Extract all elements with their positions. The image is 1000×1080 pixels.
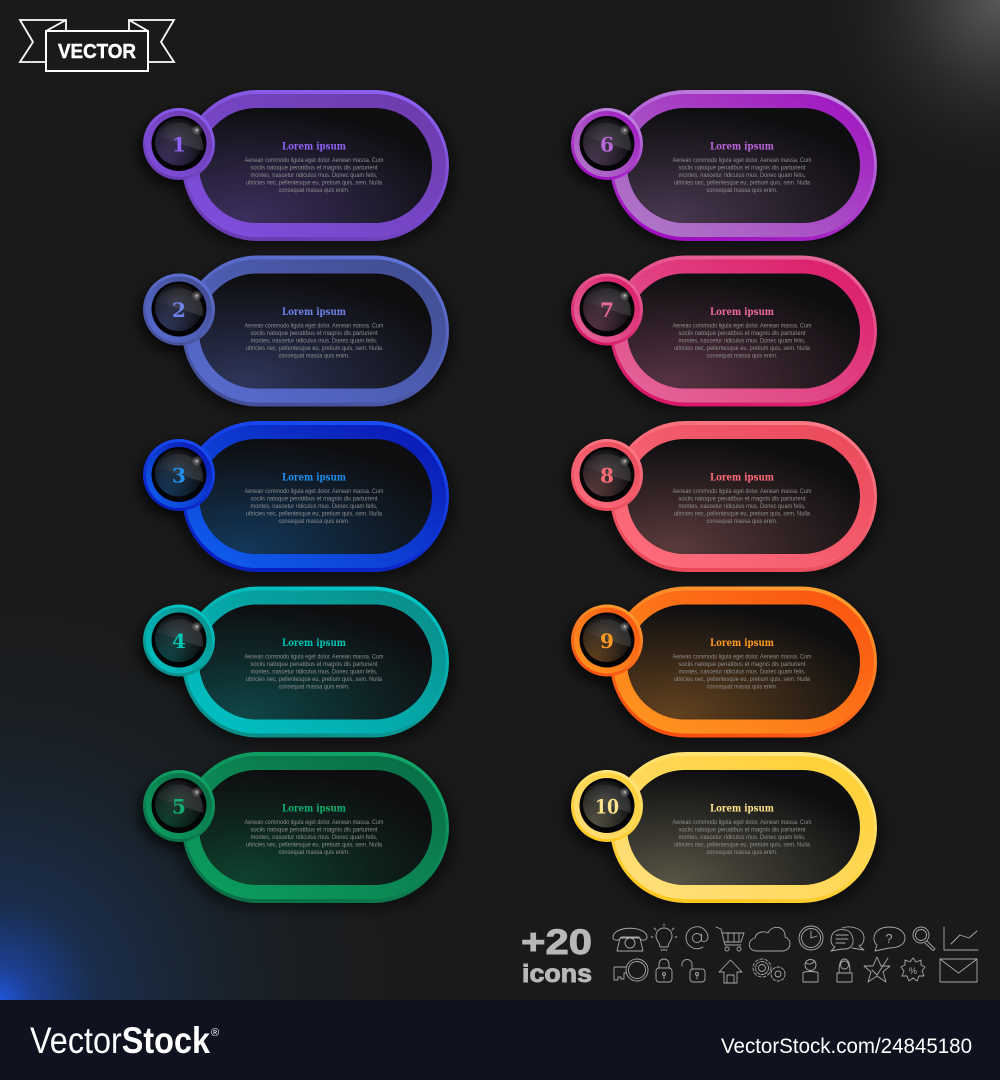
body text 3 xyxy=(244,488,384,525)
card 5: green xyxy=(138,752,455,909)
card 1: purple xyxy=(138,90,455,247)
title 1: Lorem ipsum xyxy=(282,142,346,152)
heading: +20 icons: icons xyxy=(522,960,592,988)
icon: magnifier xyxy=(913,927,935,950)
icon: light bulb xyxy=(651,924,677,950)
number badge 9 xyxy=(571,604,643,676)
icon: gears xyxy=(753,959,785,981)
number badge 10: 10 xyxy=(595,794,619,818)
frame 6 xyxy=(610,90,877,241)
frame 5 xyxy=(182,752,449,903)
number badge 8: 8 xyxy=(600,464,614,488)
number badge 7 xyxy=(571,274,643,346)
frame 1 xyxy=(182,90,449,241)
title 10: Lorem ipsum xyxy=(710,804,774,814)
number badge 9: 9 xyxy=(600,629,614,653)
number badge 1: 1 xyxy=(172,132,186,156)
heading: +20 icons xyxy=(521,923,592,988)
icon: woman xyxy=(837,959,852,982)
card 3: blue xyxy=(138,421,455,578)
registered mark: ® xyxy=(211,1027,219,1039)
card 6: violet xyxy=(566,90,883,247)
title 7: Lorem ipsum xyxy=(710,307,774,318)
title 5: Lorem ipsum xyxy=(282,804,346,814)
icon: percent burst: % xyxy=(909,966,917,976)
icon: open lock xyxy=(682,960,705,982)
body text 9 xyxy=(672,654,812,690)
icon: house xyxy=(719,960,742,983)
footer logo: VectorStock xyxy=(30,1020,210,1061)
icon: speech bubbles xyxy=(831,927,864,951)
icon: percent burst xyxy=(901,958,925,981)
icon: question bubble: ? xyxy=(885,931,893,946)
body text 2 xyxy=(244,322,384,360)
frame 7 xyxy=(610,256,877,406)
ribbon badge: vector: VECTOR xyxy=(58,41,137,63)
title 2: Lorem ipsum xyxy=(282,307,346,318)
icon: question bubble xyxy=(874,927,905,951)
body text 7 xyxy=(672,322,812,360)
body text 6 xyxy=(672,157,812,194)
number badge 2: 2 xyxy=(172,298,186,322)
number badge 8 xyxy=(571,439,643,511)
number badge 10 xyxy=(571,770,643,842)
frame 3 xyxy=(182,421,449,572)
body text 8 xyxy=(672,488,812,525)
number badge 2 xyxy=(143,274,215,346)
number badge 4: 4 xyxy=(172,629,186,653)
number badge 7: 7 xyxy=(600,298,614,322)
card 8: coral xyxy=(566,421,883,578)
icon set xyxy=(613,924,978,983)
number badge 6: 6 xyxy=(600,132,614,156)
number badge 3: 3 xyxy=(172,464,186,488)
title 4: Lorem ipsum xyxy=(282,638,346,649)
body text 1 xyxy=(244,157,384,194)
icon: key xyxy=(614,959,648,981)
card 2: slate blue xyxy=(138,256,455,412)
card 4: teal xyxy=(138,586,455,744)
number badge 1 xyxy=(143,108,215,180)
card 10: yellow xyxy=(566,752,883,909)
body text 4 xyxy=(244,654,384,690)
icon: star xyxy=(864,957,890,982)
number badge 6 xyxy=(571,108,643,180)
body text 10 xyxy=(672,819,812,856)
footer id: VectorStock.com/24845180 xyxy=(721,1035,972,1058)
number badge 3 xyxy=(143,439,215,511)
frame 10 xyxy=(610,752,877,903)
title 6: Lorem ipsum xyxy=(710,142,774,152)
title 9: Lorem ipsum xyxy=(710,638,774,649)
icon: man xyxy=(803,960,818,982)
icon: clock xyxy=(799,926,823,950)
icon: cloud xyxy=(749,927,790,951)
heading: +20 icons: +20 xyxy=(521,923,592,962)
icon: telephone xyxy=(613,928,647,951)
number badge 4 xyxy=(143,604,215,676)
title 3: Lorem ipsum xyxy=(282,472,346,484)
icon: line chart xyxy=(944,927,978,950)
icon: envelope xyxy=(940,959,977,982)
frame 9 xyxy=(610,586,877,738)
icon: shopping cart xyxy=(716,927,744,951)
frame 2 xyxy=(182,256,449,406)
icon: at sign xyxy=(686,927,708,949)
card 7: pink xyxy=(566,256,883,412)
card 9: orange xyxy=(566,586,883,744)
frame 4 xyxy=(182,586,449,738)
icon: lock xyxy=(656,959,672,982)
number badge 5 xyxy=(143,770,215,842)
frame 8 xyxy=(610,421,877,572)
number badge 5: 5 xyxy=(172,794,186,818)
body text 5 xyxy=(244,819,384,856)
footer bar xyxy=(0,1000,1000,1080)
title 8: Lorem ipsum xyxy=(710,472,774,484)
ribbon badge: vector xyxy=(20,20,174,71)
